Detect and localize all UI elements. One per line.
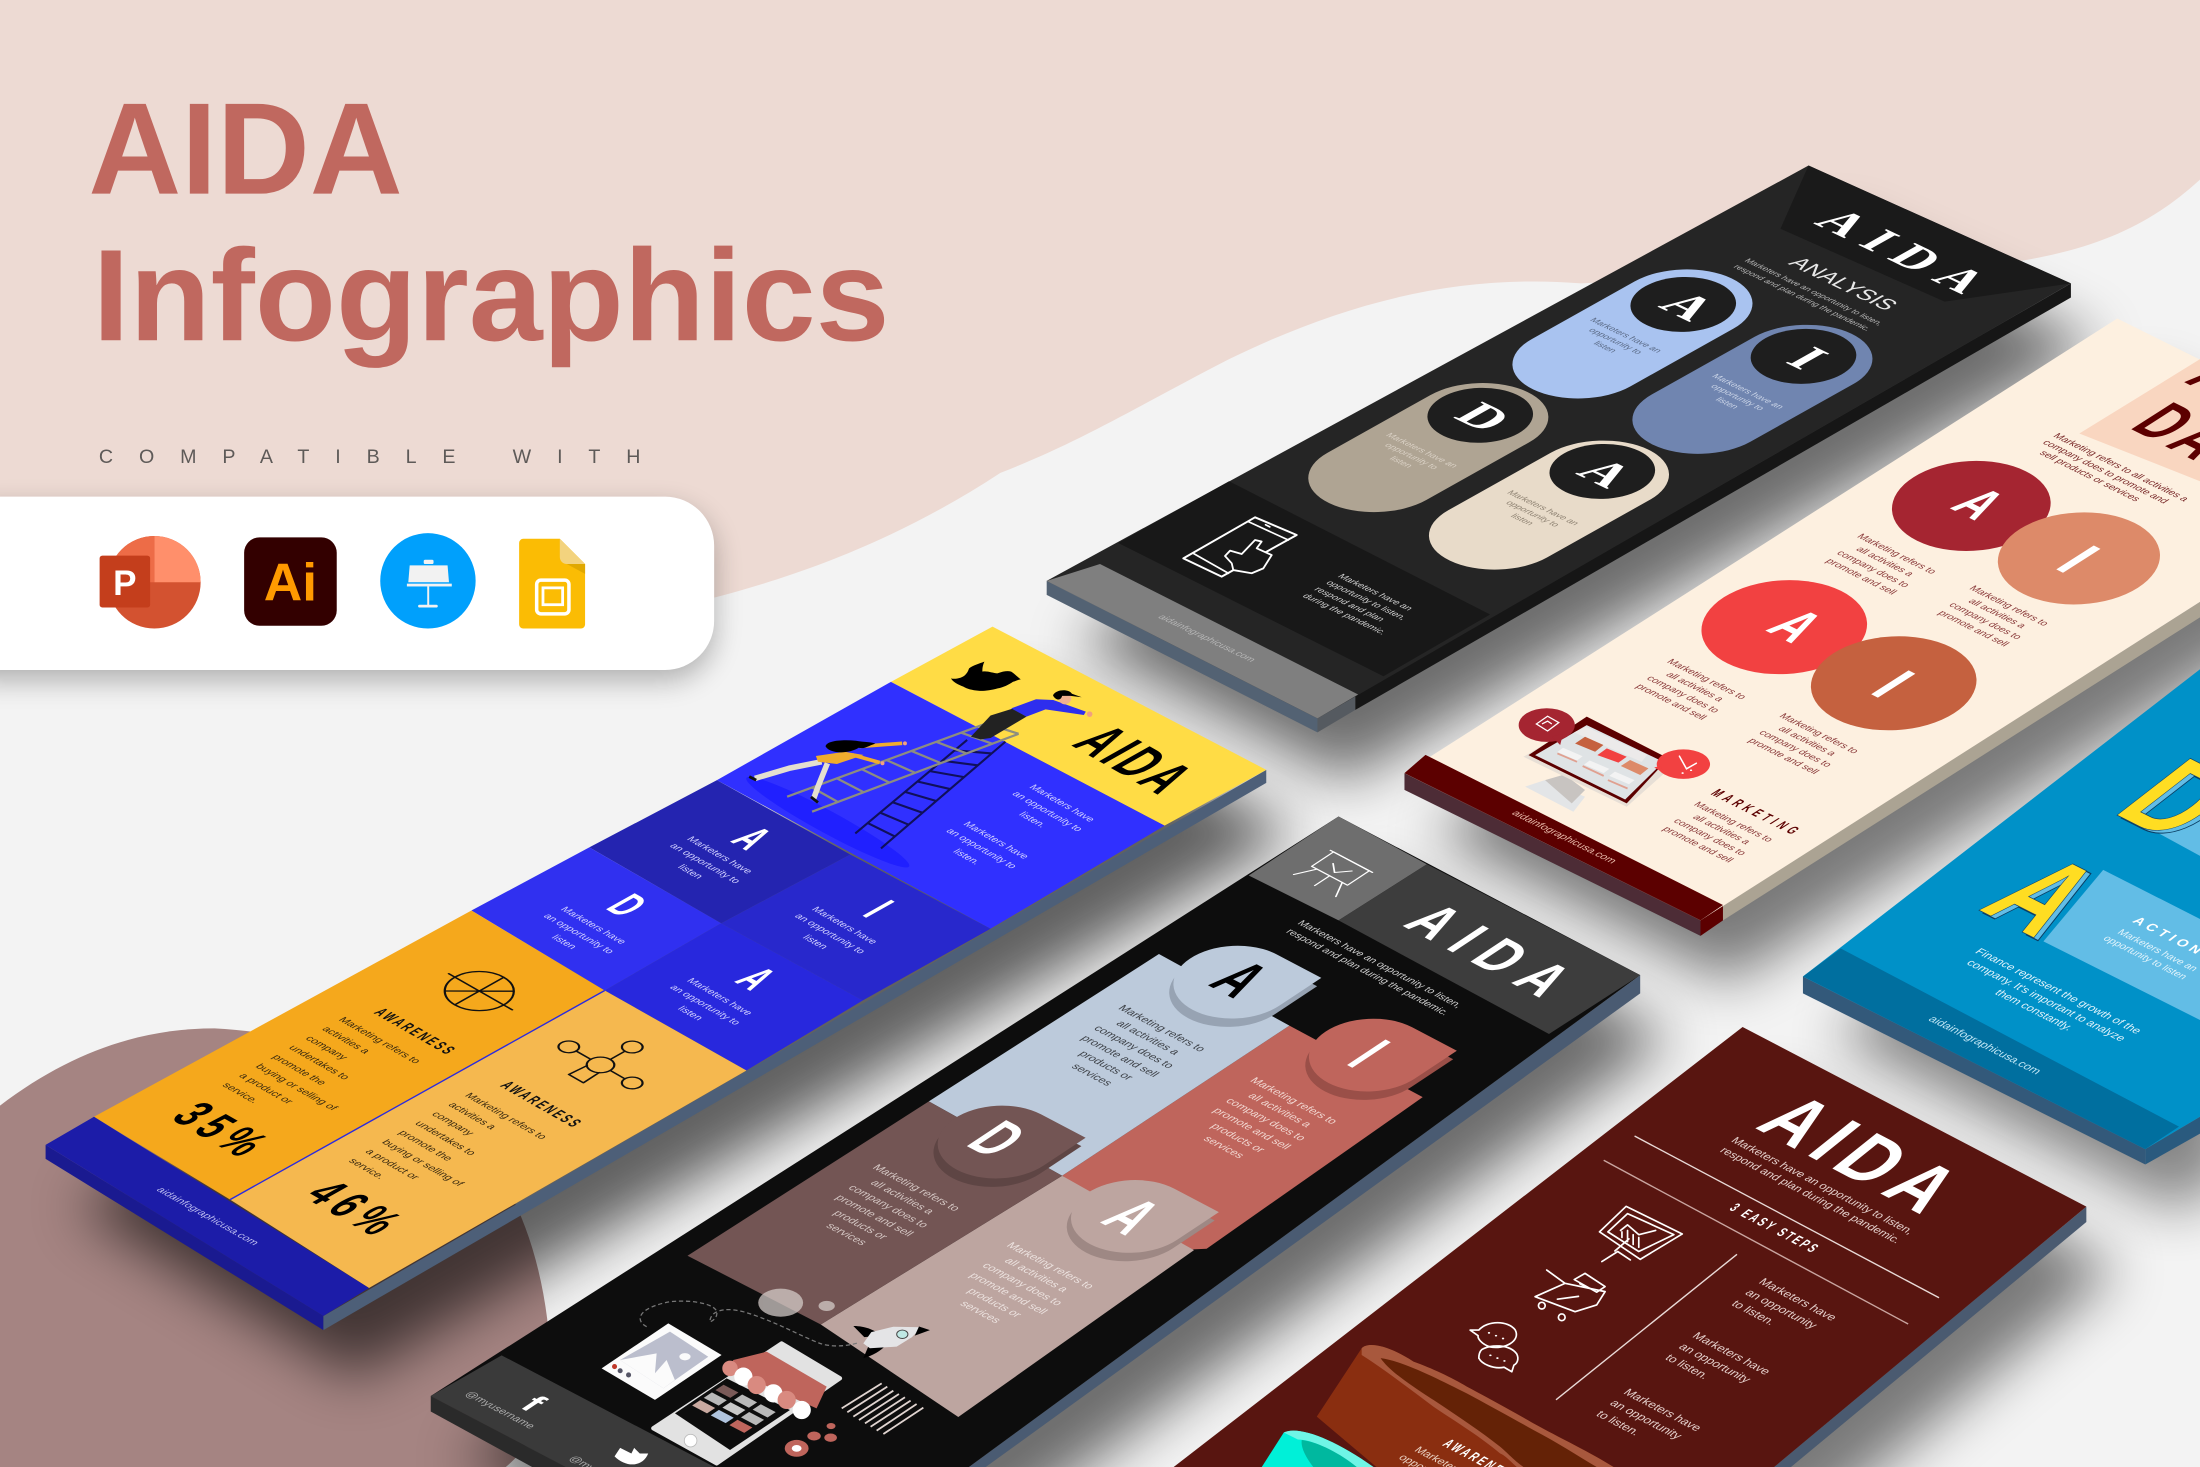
footer text: opportunity to listen, [1323,579,1409,622]
footer text: Marketers have an [1335,573,1415,612]
block: awareness 35 percent: company [302,1034,351,1062]
capsule: A second [1401,426,1697,584]
vertical rule [1556,1254,1737,1400]
icon: chart monitor [1599,1206,1682,1262]
block: A second: Marketers have [684,977,755,1017]
icon: twitter small [615,1448,648,1464]
block: awareness 46 percent: undertakes to [412,1119,479,1157]
step text 2: to listen. [1662,1352,1713,1381]
compatible with label: COMPATIBLE WITH [99,446,640,468]
capsule: D: Marketers have an [1384,432,1460,469]
puzzle piece: beige A [821,1165,1219,1417]
capsule: A [1484,255,1781,413]
step text 1: an opportunity [1742,1287,1821,1331]
capsule: D: opportunity to [1382,442,1441,471]
social handle: @myusername [462,1390,538,1431]
puzzle piece: light blue A: company does to [1091,1024,1176,1070]
capsule: I: I [1775,340,1841,376]
heading: marketing: MARKETING [1707,786,1808,839]
intro text: respond and plan during the pandemic. [1283,928,1451,1017]
block: I: I [851,894,904,924]
text block marketing: Marketing refers to [1691,801,1776,844]
icon: keynote [380,533,476,629]
block: awareness 46 percent: Marketing refers to [462,1091,550,1141]
capsule: I: listen [1713,396,1741,410]
capsule: A second: A [1565,451,1647,495]
block: awareness 35 percent: AWARENESS [370,1005,462,1058]
block: A second [605,923,863,1071]
block: awareness 35 percent: buying or selling of [252,1062,340,1112]
action text: Marketers have an [2114,928,2200,974]
circle: I brown: I [1856,662,1929,707]
block: I [721,854,991,1000]
icon: cart [1535,1270,1605,1321]
puzzle piece: brown D: Marketing refers to [870,1163,962,1213]
text block marketing: promote and sell [1659,825,1735,864]
text block 1: Marketing refers to [1854,533,1939,576]
hero text 1: an opportunity to [1009,790,1085,833]
step text 3: to listen. [1593,1408,1644,1438]
capsule: D: D [1443,395,1525,438]
block: awareness 46 percent: promote the [395,1129,455,1163]
block: D: listen [548,934,579,951]
social band [431,1355,716,1467]
puzzle piece: light blue A: all activities a [1113,1019,1183,1057]
step text 3: an opportunity [1607,1397,1685,1441]
website: aidainfographicusa.com [1925,1014,2043,1077]
block: I: listen [800,934,830,951]
icon: monitor with speech bubbles [1519,708,1710,812]
puzzle piece: light blue A: services [1068,1062,1115,1088]
intro text: respond and plan during the pandemic. [1717,1146,1903,1246]
puzzle piece: beige A: services [957,1299,1004,1325]
capsule: A: opportunity to [1586,327,1645,355]
text block 1: promote and sell [1823,557,1899,596]
text block 2: company does to [1946,601,2024,641]
puzzle piece: brown D: promote and sell [832,1193,916,1238]
text block 4: promote and sell [1745,737,1821,776]
puzzle piece: beige A: products or [964,1287,1024,1319]
icon: google slides [519,539,585,629]
icon: image card [602,1323,722,1400]
illustration: brown cup [1317,1345,1614,1467]
subheading: 3 EASY STEPS [1726,1200,1825,1256]
footer text: during the pandemic. [1299,592,1389,636]
intro text: Marketers have an opportunity to listen, [1294,919,1464,1010]
circle: I peach [1964,494,2194,623]
step text 1: Marketers have [1756,1276,1841,1323]
puzzle piece: red I: all activities a [1245,1092,1315,1130]
text block 1: company does to [1834,549,1912,590]
dashed route [640,1301,859,1346]
puzzle piece: red I: I [1333,1030,1405,1077]
puzzle piece: light blue A [929,931,1321,1176]
block: awareness 46 percent: 46% [293,1174,420,1246]
puzzle piece: light blue A: products or [1076,1049,1136,1082]
puzzle piece: brown D: D [951,1111,1043,1168]
puzzle piece: brown D: products or [830,1209,890,1242]
puzzle piece: light blue A: Marketing refers to [1115,1004,1208,1054]
footer strip [1047,564,1358,718]
title [88,76,890,368]
block: awareness 46 percent: activities a [445,1101,499,1131]
intro text: company does to promote and [2040,439,2171,505]
panel: maroon infographic [1173,1027,2117,1467]
circle: A dark [1859,442,2083,569]
capsule: A: A [1647,284,1730,328]
hatch lines [842,1383,923,1434]
text block 4: company does to [1756,729,1834,769]
puzzle piece: red I [1062,1004,1457,1250]
text block 3: promote and sell [1633,683,1709,722]
capsule: A second: listen [1508,512,1536,527]
finance text: company. It's important to analyze [1964,958,2128,1044]
puzzle piece: red I: promote and sell [1210,1106,1293,1151]
title: Infographics [93,222,890,368]
hero text 2: an opportunity to [943,827,1019,871]
puzzle piece: beige A: company does to [979,1261,1065,1308]
finance text: Finance represent the growth of the [1972,947,2144,1036]
capsule: A: Marketers have an [1588,317,1664,354]
hero text 2: listen. [950,848,983,866]
capsule: A: listen [1591,340,1619,354]
circle: I peach: I [2041,537,2115,582]
hero text 1: Marketers have [1026,783,1097,824]
heading: AIDA: AIDA [1058,717,1211,804]
text block 3: Marketing refers to [1664,658,1749,701]
intro text: sell products or services [2036,449,2142,503]
ground shadow [741,768,915,876]
block: I: Marketers have [809,906,880,946]
header box [2079,359,2200,481]
block: D: Marketers have [557,906,629,946]
block: A second: an opportunity to [667,984,743,1027]
icon: phone shop [653,1343,840,1463]
block: A: A [720,821,783,856]
letter A yellow: A [1954,835,2131,957]
icon: twitter bird [951,662,1021,691]
footer text: respond and plan [1311,586,1387,623]
illustration: ladder and figures [749,690,1092,848]
gray icon tile [1249,817,1427,920]
illustration: bubbles [758,1289,835,1317]
panel: blue and yellow infographic [46,627,1297,1378]
light panel upper [2154,807,2200,856]
block: A second: A [724,961,787,997]
footer strip [1803,948,2179,1149]
block: awareness 35 percent: undertakes to [286,1044,352,1082]
block: awareness 46 percent: company [429,1110,477,1138]
icon: phone touch [1183,517,1297,577]
capsule: A second: Marketers have an [1505,489,1582,527]
header banner [1780,166,2071,302]
puzzle piece: brown D: all activities a [867,1179,937,1217]
capsule: D [1280,368,1577,527]
yellow header [891,627,1266,826]
capsule: I [1604,310,1901,469]
block: D [471,847,721,991]
intro text: Marketers have an opportunity to listen, [1728,1136,1916,1236]
step text 2: Marketers have [1689,1330,1774,1377]
icon: easel [1294,850,1372,897]
footer strip [46,1117,369,1316]
hero text 1: listen. [1016,811,1049,829]
puzzle piece: beige A: promote and sell [966,1271,1050,1316]
block: awareness 35 percent: a product or [236,1072,296,1106]
block: A: Marketers have [684,835,755,876]
step text 1: to listen. [1728,1298,1779,1327]
intro text: Marketing refers to all activities a [2050,432,2191,503]
block: A: listen [675,863,705,881]
text block 4: all activities a [1775,725,1838,758]
panel: black puzzle infographic [431,817,1671,1467]
hero text 2: Marketers have [960,820,1031,861]
panel: cream marketing infographic [1404,318,2200,982]
icon: hearts [785,1423,837,1457]
icon: rocket [853,1326,930,1358]
block: awareness 35 percent [94,911,605,1200]
puzzle piece: brown D: services [823,1222,870,1247]
text block 4: Marketing refers to [1776,712,1861,756]
rule 2 [1604,1160,1908,1324]
website: aidainfographicusa.com [153,1186,262,1247]
heading: AIDA serif: AIDA [1803,202,2001,300]
block: awareness 46 percent: a product or [362,1147,422,1182]
pink background blob [0,0,2200,617]
block: awareness 46 percent: buying or selling of [379,1138,466,1188]
website: aidainfographicusa.com [1155,613,1258,664]
heading: AIDA: AIDA [1740,1081,1988,1230]
circle: A dark: A [1938,479,2020,528]
panel: software compatibility [0,497,714,680]
step text 2: an opportunity [1676,1341,1754,1385]
puzzle piece: red I: services [1200,1135,1247,1160]
icon: powerpoint [100,536,201,629]
footer band [1118,481,1490,676]
icon: facebook: f [512,1391,554,1417]
title band [1339,864,1640,1034]
block: I: an opportunity to [791,912,867,956]
website: aidainfographicusa.com [1509,809,1620,866]
blue hero [717,682,1165,929]
icon: illustrator [244,537,337,626]
puzzle piece: light blue A: A [1194,951,1285,1008]
block: A: an opportunity to [667,842,743,885]
text block 3: company does to [1643,675,1722,715]
text block marketing: all activities a [1690,813,1753,846]
intro text: Marketers have an opportunity to listen, [1742,257,1886,327]
block: D: an opportunity to [540,912,616,956]
panel: blue action infographic [1803,669,2200,1211]
puzzle piece: light blue A: promote and sell [1078,1034,1161,1079]
block: awareness 35 percent: service. [219,1081,262,1105]
capsule: D: listen [1387,455,1415,469]
intro text: respond and plan during the pandemic. [1731,263,1874,332]
panel: black analysis infographic [1047,166,2099,780]
puzzle piece: red I: company does to [1223,1096,1308,1143]
block: awareness 35 percent: Marketing refers to [336,1016,423,1065]
block: awareness 46 percent: AWARENESS [496,1078,588,1131]
footer strip [1404,755,1723,920]
text block 3: all activities a [1663,671,1726,704]
mauve background blob [0,1028,549,1467]
puzzle piece: red I: Marketing refers to [1247,1076,1340,1126]
circle: A red [1667,561,1901,693]
block: A second: listen [675,1005,705,1022]
puzzle piece: beige A: all activities a [1001,1256,1071,1294]
circle: I brown [1777,617,2011,749]
letter A yellow: A [1958,838,2135,960]
capsule: I: Marketers have an [1710,373,1786,410]
heading: AIDA: AIDA [1390,894,1600,1012]
block: D: D [595,888,658,924]
puzzle piece: beige A: Marketing refers to [1004,1241,1096,1291]
icon: powerpoint: P [113,564,137,603]
text block 1: all activities a [1853,546,1916,578]
action text: opportunity to listen [2100,934,2189,982]
heading: analysis: ANALYSIS [1783,254,1904,313]
icon: chat bubbles [1470,1323,1518,1372]
text block 2: promote and sell [1935,609,2011,648]
text block 2: all activities a [1965,597,2028,630]
block: awareness 35 percent: activities a [319,1025,373,1055]
capsule: I: opportunity to [1708,383,1767,412]
block: awareness 46 percent: service. [345,1157,388,1181]
block: awareness 35 percent: 35% [159,1095,286,1167]
puzzle piece: beige A: A [1086,1188,1177,1245]
light panel [2043,870,2200,1020]
text block marketing: company does to [1670,817,1749,858]
step text 3: Marketers have [1620,1386,1705,1434]
text block 2: Marketing refers to [1966,585,2051,628]
block: A [589,780,850,923]
illustration: teal cup [1262,1431,1373,1467]
block: awareness 35 percent: promote the [269,1053,329,1087]
capsule: A second: opportunity to [1504,499,1562,528]
block: awareness 46 percent [230,991,746,1288]
puzzle piece: brown D [688,1091,1086,1324]
icon: illustrator: Ai [264,553,317,612]
circle: A red: A [1753,601,1838,651]
rule 1 [1635,1136,1939,1298]
puzzle piece: red I: products or [1208,1122,1267,1155]
puzzle piece: brown D: company does to [845,1183,931,1230]
title: AIDA [88,76,403,222]
finance text: them constantly. [1992,988,2075,1033]
